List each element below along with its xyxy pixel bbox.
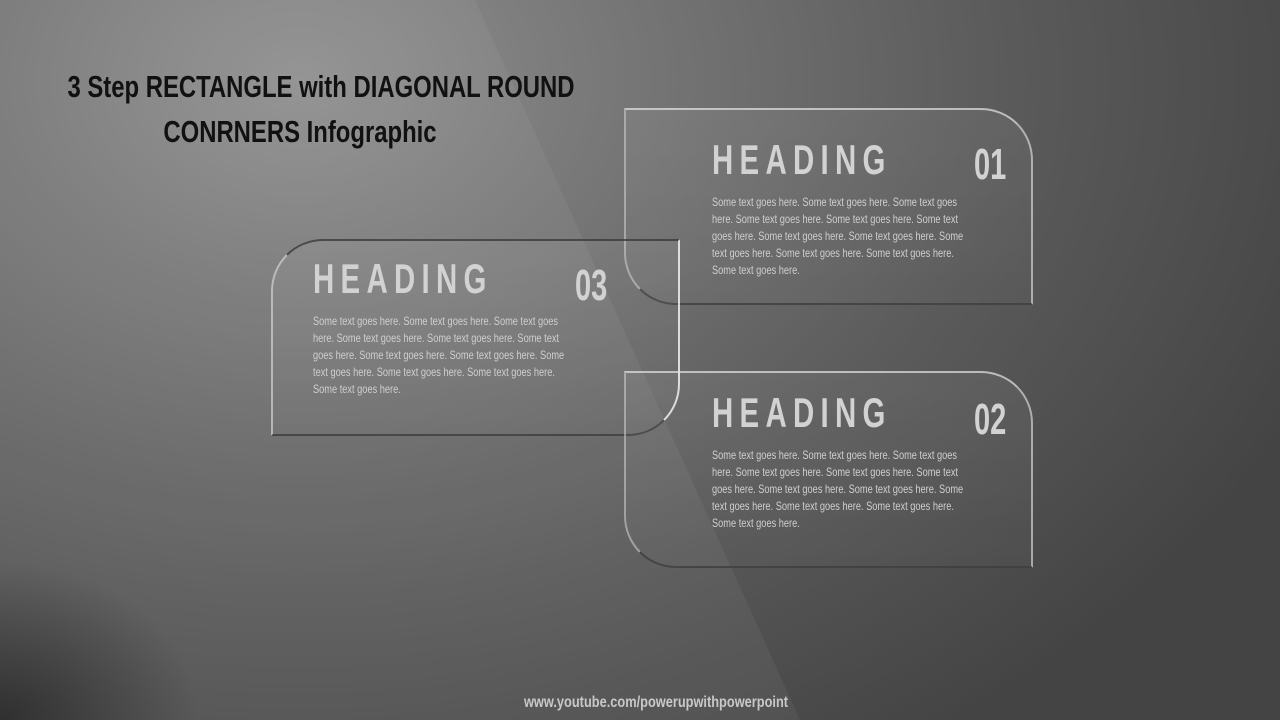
number 03: 03	[575, 261, 607, 310]
text 02: Some text goes here. Some text goes here. Some text goes here. Some text goes here. Some text goes here. Some text goes here. Some text goes here. Some text goes here. Some text goes here. Some text goes here. Some text goes here. Some text goes here.	[712, 448, 963, 530]
number 01: 01	[974, 140, 1006, 189]
title: 3 Step RECTANGLE with DIAGONAL ROUND	[67, 69, 574, 104]
panel: step 02	[624, 371, 1033, 568]
heading 03: HEADING	[313, 255, 493, 302]
title: CONRNERS Infographic	[163, 114, 437, 149]
text 03: Some text goes here. Some text goes here. Some text goes here. Some text goes here. Some text goes here. Some text goes here. Some text goes here. Some text goes here. Some text goes here. Some text goes here. Some text goes here. Some text goes here.	[313, 314, 564, 396]
heading 01: HEADING	[712, 136, 892, 183]
number 02: 02	[974, 395, 1006, 444]
panel: step 03	[271, 239, 680, 436]
panel: step 01	[624, 108, 1033, 305]
heading 02: HEADING	[712, 389, 892, 436]
footer url: www.youtube.com/powerupwithpowerpoint	[524, 694, 788, 711]
text 01: Some text goes here. Some text goes here. Some text goes here. Some text goes here. Some text goes here. Some text goes here. Some text goes here. Some text goes here. Some text goes here. Some text goes here. Some text goes here. Some text goes here.	[712, 195, 963, 277]
title	[67, 69, 574, 149]
